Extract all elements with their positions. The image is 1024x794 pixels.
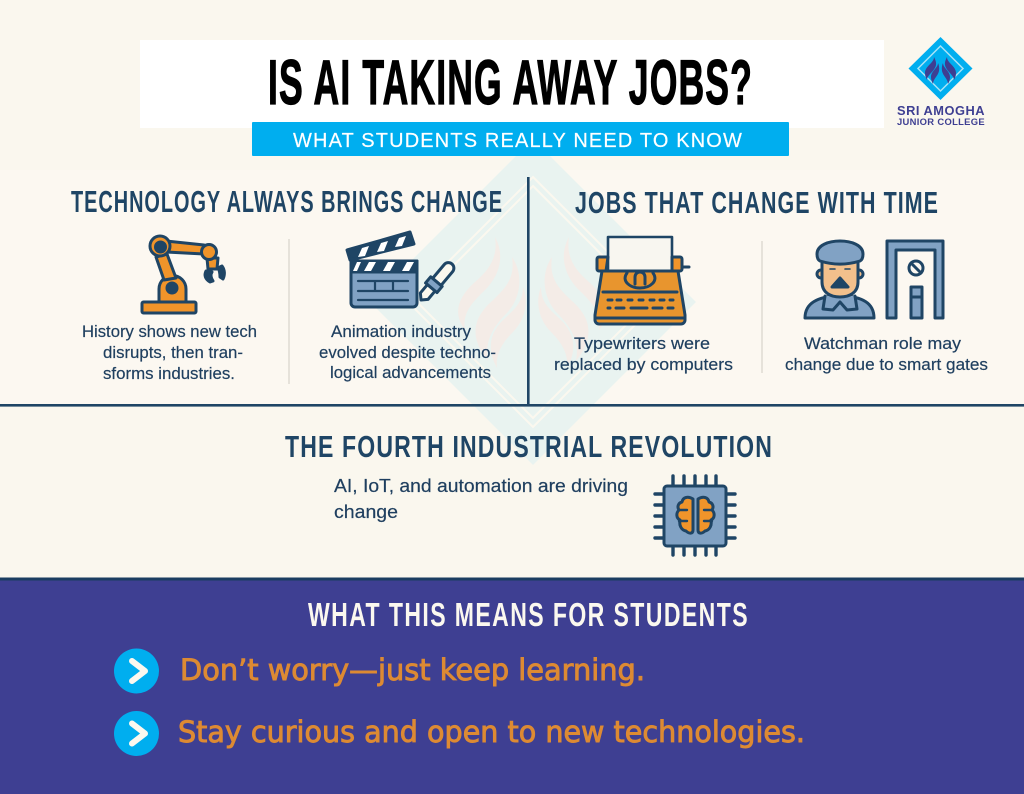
panel: what this means for students <box>0 578 1024 794</box>
bullet 2 <box>114 711 805 756</box>
icon: typewriter <box>595 237 689 324</box>
heading: technology: TECHNOLOGY ALWAYS BRINGS CHANGE <box>71 185 503 219</box>
subtitle banner <box>252 122 789 156</box>
text: AI, IoT <box>334 475 628 522</box>
text: animation: evolved despite techno- <box>319 344 496 362</box>
text: AI, IoT: change <box>334 501 398 522</box>
text: history: History shows new tech <box>82 323 257 341</box>
bullet 2: Stay curious and open to new technologies. <box>178 715 805 749</box>
subtitle banner: WHAT STUDENTS REALLY NEED TO KNOW <box>293 129 743 152</box>
text: animation: Animation industry <box>331 323 472 341</box>
text: history: disrupts, then tran- <box>103 344 243 362</box>
text: animation <box>319 323 496 382</box>
watermark logo <box>370 139 696 465</box>
text: history <box>82 323 257 383</box>
text: typewriters: replaced by computers <box>554 356 733 374</box>
text: watchman: Watchman role may <box>804 335 962 353</box>
text: typewriters: Typewriters were <box>574 335 710 353</box>
text: history: sforms industries. <box>103 365 235 383</box>
text: animation: logical advancements <box>330 364 491 382</box>
text: watchman: change due to smart gates <box>785 356 988 374</box>
heading: students: WHAT THIS MEANS FOR STUDENTS <box>308 596 749 633</box>
text: typewriters <box>554 335 733 374</box>
logo: Sri Amogha Junior College: SRI AMOGHA <box>897 104 985 118</box>
heading: fourth industrial revolution: THE FOURTH INDUSTRIAL REVOLUTION <box>285 430 773 464</box>
bullet 1: Don’t worry—just keep learning. <box>180 653 645 687</box>
text: AI, IoT: AI, IoT, and automation are driving <box>334 475 628 496</box>
bullet 1 <box>114 648 645 694</box>
icon: watchman and smart gate <box>805 241 943 318</box>
logo: Sri Amogha Junior College: JUNIOR COLLEGE <box>897 117 985 127</box>
icon: clapperboard <box>347 232 457 307</box>
text: watchman <box>785 335 988 374</box>
icon: AI chip with brain <box>655 476 735 555</box>
icon: robot arm <box>142 236 224 313</box>
logo: Sri Amogha Junior College <box>897 37 985 127</box>
title box <box>140 40 884 128</box>
